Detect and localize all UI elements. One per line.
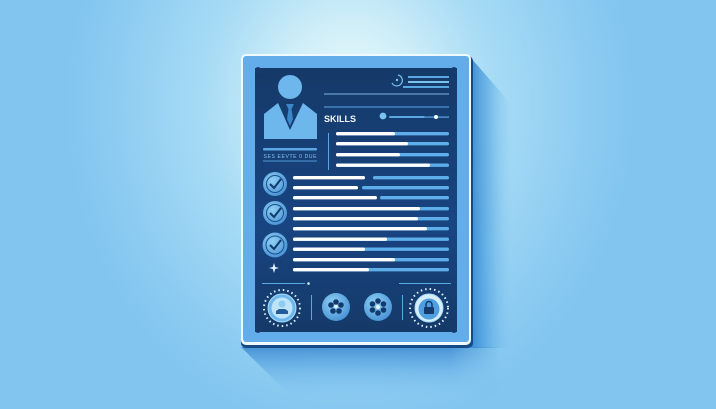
icon: profile seal (264, 290, 300, 326)
name bar and caption (263, 148, 317, 162)
icon: flower badge 1 (322, 293, 350, 321)
dark inner panel (255, 68, 457, 332)
vertical rule (328, 133, 329, 170)
icon: check badge 2 (263, 201, 287, 225)
skill bars (336, 132, 449, 167)
profile avatar (264, 75, 317, 139)
divider lines (324, 94, 449, 95)
icon: check badge 3 (262, 232, 288, 258)
checklist bars (293, 176, 449, 271)
icon: check badge 1 (263, 172, 287, 196)
icon: sparkle (269, 263, 279, 273)
corner ornaments (256, 68, 456, 332)
footer rules (262, 282, 451, 320)
heading: skills: SKILLS (324, 114, 356, 125)
header widget (392, 75, 449, 88)
icon: lock seal (410, 289, 448, 327)
name bar and caption: SES EEVTE 0 DUE (264, 154, 317, 160)
resume card (241, 54, 473, 348)
skill slider (380, 113, 449, 119)
card drop shadow (241, 60, 506, 384)
infographic: resume document illustration (110, 0, 591, 380)
icon: flower badge 2 (364, 293, 392, 321)
